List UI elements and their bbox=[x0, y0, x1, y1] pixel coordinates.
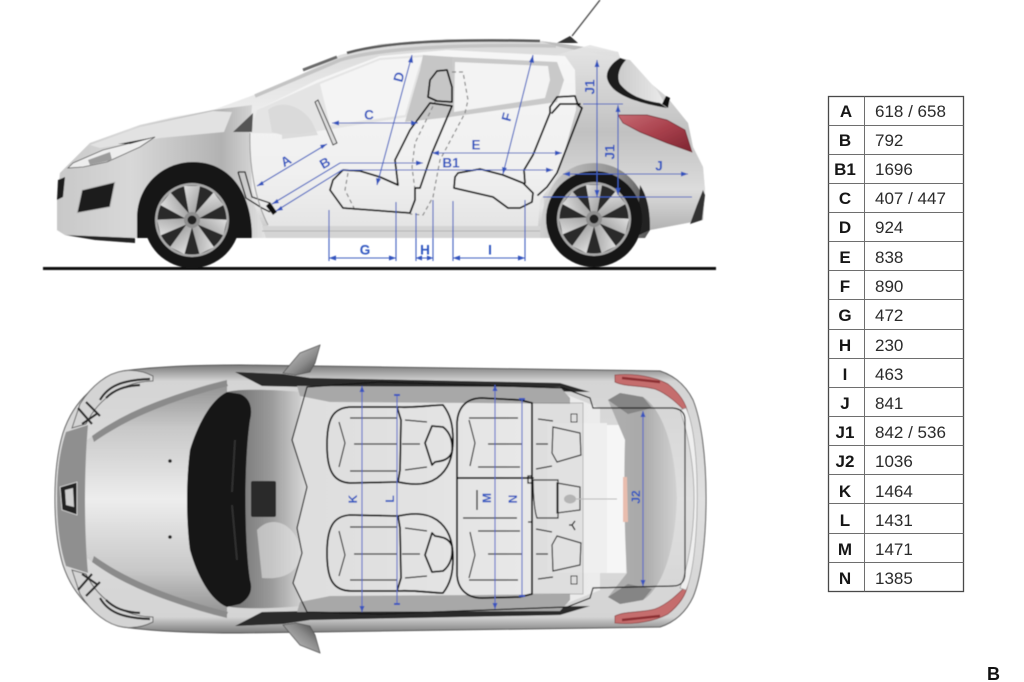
dashboard bbox=[227, 390, 307, 608]
windscreen bbox=[187, 392, 251, 607]
row letters: D bbox=[839, 218, 851, 237]
car body silhouette bbox=[57, 39, 705, 238]
dimension labels, side view: D bbox=[390, 70, 408, 84]
rear load floor bbox=[547, 423, 607, 573]
hood dots bbox=[168, 459, 172, 539]
dimension labels, side view: H bbox=[420, 242, 430, 258]
dimensions table bbox=[828, 96, 964, 592]
dimension labels, side view: J1 bbox=[582, 79, 598, 95]
dimension labels, side view bbox=[278, 70, 663, 258]
row letters: B bbox=[839, 131, 851, 150]
rear arch bbox=[540, 163, 650, 238]
rear quarter panel bbox=[540, 45, 705, 238]
antenna bbox=[572, 0, 600, 36]
row values: 1696 bbox=[875, 160, 913, 179]
row values: 838 bbox=[875, 248, 903, 267]
dimension labels, side view: E bbox=[471, 138, 481, 152]
dimension lines, top view bbox=[362, 385, 643, 612]
row values bbox=[875, 102, 946, 588]
upper body details bbox=[72, 345, 688, 442]
rear bench outline bbox=[457, 398, 533, 598]
front fender shading bbox=[57, 105, 268, 238]
front wheel bbox=[144, 172, 240, 268]
dimension labels, side view: I bbox=[488, 242, 492, 258]
row values: 472 bbox=[875, 306, 903, 325]
dimension labels, top view: N bbox=[506, 495, 520, 503]
fog lamp bbox=[77, 182, 115, 213]
pedal outline bbox=[238, 172, 276, 212]
dimension labels, side view: F bbox=[499, 111, 515, 123]
row values: 463 bbox=[875, 365, 903, 384]
side mirror bbox=[233, 113, 253, 132]
front seat lower bbox=[327, 514, 453, 593]
row letters: I bbox=[843, 365, 847, 384]
side view of the car bbox=[43, 0, 716, 270]
row values: 842 / 536 bbox=[875, 423, 946, 442]
rear quarter glass bbox=[607, 58, 667, 107]
cabin outline bbox=[292, 382, 685, 614]
front side window bbox=[250, 55, 423, 134]
dimension labels, top view: K bbox=[346, 494, 360, 503]
dimension labels, top view: M bbox=[480, 493, 494, 503]
row letters: K bbox=[839, 482, 852, 501]
row letters: L bbox=[840, 511, 850, 530]
row letters: H bbox=[839, 336, 851, 355]
front seat dashed position bbox=[345, 72, 468, 215]
row letters: C bbox=[839, 189, 851, 208]
ground line bbox=[43, 267, 716, 270]
rear seats bbox=[469, 414, 581, 469]
hood bbox=[85, 380, 227, 618]
rear glass bbox=[608, 393, 677, 604]
dimension labels, side view: B1 bbox=[442, 156, 460, 170]
dimension ends, top view bbox=[360, 385, 646, 612]
row values: 792 bbox=[875, 131, 903, 150]
front bumper dark lip bbox=[65, 235, 135, 243]
row values: 924 bbox=[875, 218, 903, 237]
top view of the car bbox=[55, 345, 706, 653]
row values: 1431 bbox=[875, 511, 913, 530]
row values: 890 bbox=[875, 277, 903, 296]
headlight bbox=[68, 137, 155, 168]
row values: 1464 bbox=[875, 482, 913, 501]
dimension lines, side view bbox=[257, 55, 692, 261]
rear seat lower bbox=[469, 529, 581, 584]
row values: 618 / 658 bbox=[875, 102, 946, 121]
dimension labels, top view: L bbox=[383, 495, 397, 503]
row letters: N bbox=[839, 569, 851, 588]
sill bbox=[262, 226, 545, 238]
dimension labels, side view: J bbox=[655, 158, 663, 174]
front seat outline bbox=[330, 70, 452, 213]
row letters bbox=[834, 102, 856, 588]
rear wheel bbox=[546, 171, 642, 267]
B pillar bbox=[405, 55, 453, 122]
row letters: J1 bbox=[836, 423, 854, 442]
car body outline bbox=[55, 365, 706, 633]
row letters: A bbox=[840, 102, 852, 121]
centre screen bbox=[251, 481, 276, 517]
table grid bbox=[828, 96, 964, 592]
dimension labels, side view: B bbox=[317, 154, 333, 172]
row letters: J2 bbox=[836, 452, 854, 471]
badge lion bbox=[65, 488, 74, 507]
front seats bbox=[327, 405, 453, 484]
roof rails bbox=[255, 36, 620, 96]
steering wheel bar bbox=[315, 100, 337, 145]
dimension labels, side view: C bbox=[364, 108, 374, 122]
rear bumper bbox=[690, 190, 705, 224]
wiper lines bbox=[232, 440, 237, 560]
row values: 407 / 447 bbox=[875, 189, 946, 208]
lower body details bbox=[72, 556, 688, 653]
row letters: F bbox=[840, 277, 850, 296]
badge bbox=[60, 482, 77, 515]
dimension labels, top view bbox=[346, 490, 643, 504]
dimension labels, side view: J1 bbox=[602, 144, 618, 160]
row values: 841 bbox=[875, 394, 903, 413]
row letters: G bbox=[838, 306, 852, 325]
rear seat back frame bbox=[532, 403, 583, 594]
row values: 230 bbox=[875, 336, 903, 355]
row letters: J bbox=[840, 394, 850, 413]
row letters: M bbox=[838, 540, 852, 559]
steering wheel hub shadow bbox=[257, 522, 302, 578]
nose panel bbox=[57, 425, 88, 573]
front arch bbox=[137, 162, 252, 238]
hood highlight bbox=[90, 111, 232, 148]
dimension labels, top view: J2 bbox=[629, 490, 643, 504]
high level stop lamp bbox=[623, 477, 628, 522]
row values: 1385 bbox=[875, 569, 913, 588]
row values: 1036 bbox=[875, 452, 913, 471]
tail light bbox=[618, 115, 692, 152]
rear side window bbox=[450, 57, 564, 117]
door seam bbox=[250, 133, 268, 225]
rear edge strip bbox=[680, 408, 697, 590]
rear glass dark edge bbox=[607, 58, 667, 108]
grille bbox=[57, 177, 65, 200]
row values: 1471 bbox=[875, 540, 913, 559]
rear centre seat bbox=[463, 476, 617, 530]
door panels bbox=[250, 50, 576, 227]
rear seat outline bbox=[454, 96, 582, 208]
row letters: B1 bbox=[834, 160, 856, 179]
cabin area bbox=[240, 392, 600, 606]
dimension labels, side view: A bbox=[278, 152, 294, 170]
row letters: E bbox=[839, 248, 851, 267]
dimension arrowheads bbox=[257, 55, 688, 260]
dimension labels, side view: G bbox=[360, 242, 370, 258]
